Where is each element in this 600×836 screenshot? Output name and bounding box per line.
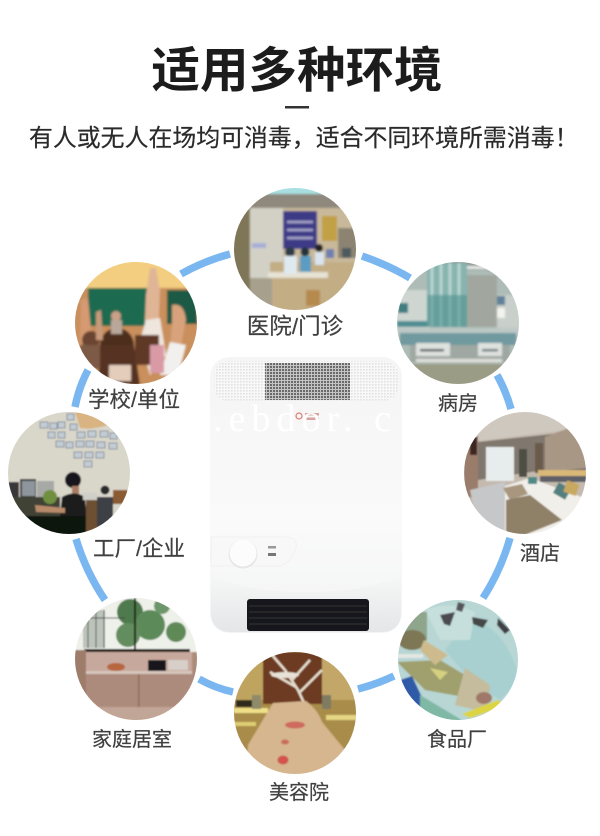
device body — [210, 357, 402, 633]
watermark: .ebdor. c — [213, 398, 397, 440]
scene: hotel room — [464, 412, 586, 534]
label: beauty salon: 美容院 — [269, 781, 329, 804]
label: hospital: 医院/门诊 — [247, 314, 344, 339]
scene: home living room — [72, 595, 200, 722]
label: enterprise: 工厂/企业 — [93, 537, 185, 561]
label: hotel: 酒店 — [520, 542, 560, 565]
scene: office enterprise — [5, 410, 133, 538]
scene: beauty salon — [234, 652, 356, 774]
label: ward: 病房 — [438, 392, 478, 415]
label: home: 家庭居室 — [92, 728, 172, 751]
scene: food factory — [398, 600, 518, 720]
scene: hospital clinic — [234, 188, 356, 310]
title: 适用多种环境 — [151, 44, 443, 98]
brand logo — [296, 413, 319, 420]
air outlet grille — [247, 599, 369, 631]
scene: hospital ward — [395, 260, 521, 386]
air vent top — [265, 363, 350, 400]
control panel recess — [211, 537, 296, 566]
perforated top panel — [214, 361, 398, 401]
connecting ring arcs — [75, 254, 511, 692]
control knob — [228, 540, 258, 568]
scene: classroom — [72, 260, 200, 386]
title divider dash — [285, 106, 309, 108]
knob labels — [268, 546, 276, 556]
label: school: 学校/单位 — [88, 388, 180, 412]
product: wall-mounted disinfection device — [210, 357, 402, 633]
label: food factory: 食品厂 — [427, 728, 487, 751]
device lower shell — [211, 574, 401, 632]
subtitle: 有人或无人在场均可消毒，适合不同环境所需消毒！ — [29, 125, 578, 152]
